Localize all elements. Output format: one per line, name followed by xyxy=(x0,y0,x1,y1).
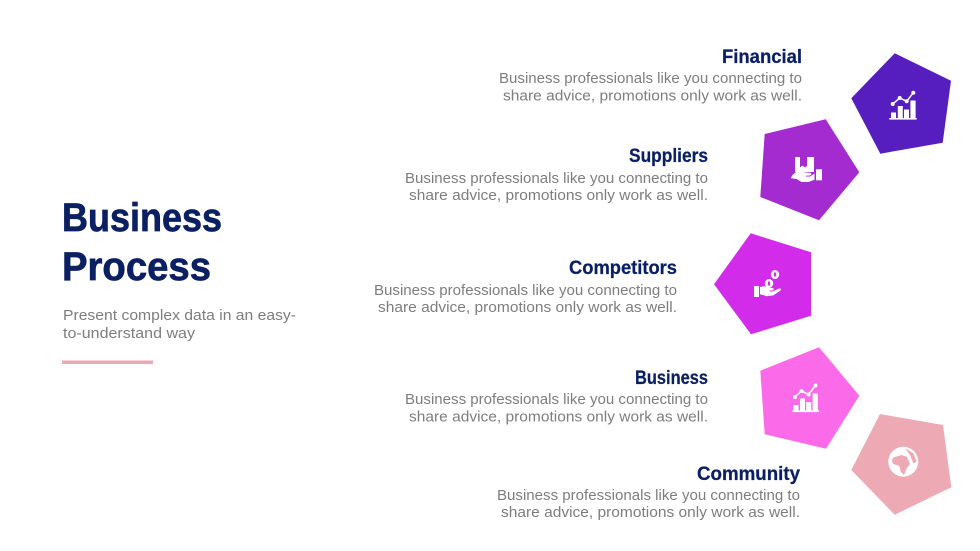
icon: globe (Community) xyxy=(888,447,918,477)
subtitle text: to-understand way xyxy=(63,325,196,342)
pentagon: Competitors xyxy=(714,233,811,334)
pentagon: Community xyxy=(851,414,951,515)
pentagon: Financial xyxy=(851,53,951,154)
icon: bar chart with trend line (Financial) xyxy=(889,91,917,120)
title xyxy=(62,196,222,289)
pentagon: Suppliers xyxy=(760,119,859,220)
accent underline xyxy=(62,360,153,364)
subtitle text xyxy=(63,307,296,342)
text block: Business: Business xyxy=(635,368,708,389)
text block: Financial: share advice, promotions only work as well. xyxy=(503,88,802,104)
text block: Suppliers: share advice, promotions only work as well. xyxy=(409,187,708,204)
text block: Suppliers xyxy=(405,146,708,204)
text block: Community: Business professionals like you connecting to xyxy=(497,487,800,504)
icon: hand receiving coins (Competitors) xyxy=(754,270,781,297)
icon: hand holding boxes (Suppliers) xyxy=(791,157,822,182)
text block: Financial: Business professionals like you connecting to xyxy=(499,70,802,87)
subtitle text: Present complex data in an easy- xyxy=(63,307,296,324)
text block: Business: share advice, promotions only work as well. xyxy=(409,408,708,426)
text block: Financial xyxy=(499,47,802,104)
text block: Competitors: share advice, promotions only work as well. xyxy=(378,299,677,316)
text block: Business: Business professionals like you connecting to xyxy=(405,391,708,408)
text block: Financial: Financial xyxy=(722,47,802,68)
text block: Business xyxy=(405,368,708,426)
text block: Community xyxy=(497,464,800,521)
title: Process xyxy=(62,245,211,289)
text block: Competitors: Business professionals like you connecting to xyxy=(374,282,677,299)
text block: Competitors xyxy=(374,258,677,316)
text block: Competitors: Competitors xyxy=(569,258,677,279)
pentagon: Business xyxy=(760,347,859,449)
text block: Community: share advice, promotions only work as well. xyxy=(501,504,800,521)
text block: Suppliers: Business professionals like you connecting to xyxy=(405,170,708,187)
title: Business xyxy=(62,196,222,240)
icon: bar chart with trend line (Business) xyxy=(792,384,819,412)
text block: Suppliers: Suppliers xyxy=(629,146,708,167)
text block: Community: Community xyxy=(697,464,800,485)
